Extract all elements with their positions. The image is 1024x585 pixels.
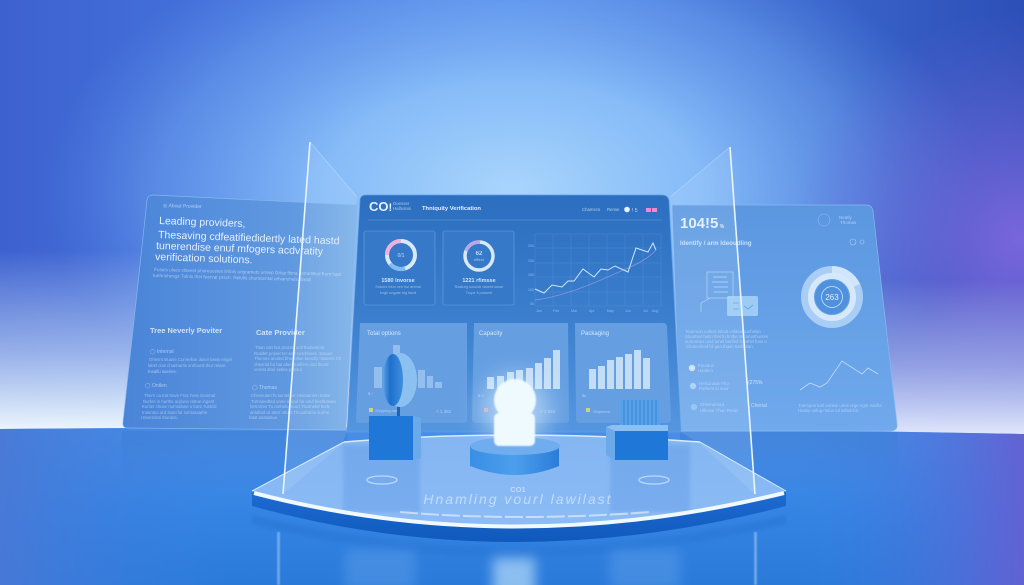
chart card: capacity: $ 0 bbox=[478, 393, 484, 398]
chart card: total: < 1 382 bbox=[436, 409, 452, 414]
right panel header: Thomas bbox=[840, 220, 857, 225]
chart card: total: Shipping data bbox=[375, 408, 400, 413]
stat card 2: Rasturg sounde darest sruse bbox=[455, 285, 503, 289]
left panel text: tunerendise enuf mfogers acdvratity bbox=[156, 240, 324, 258]
icon: glowing centre pedestal bbox=[470, 376, 560, 475]
chart card: packaging bbox=[575, 323, 671, 423]
base platform bbox=[252, 435, 786, 542]
left panel text bbox=[141, 203, 342, 420]
left panel text: fatat anstutsue. bbox=[249, 415, 278, 420]
right panel body text: Stuartset hatin thel fu bnthe nel arusthuntes bbox=[685, 334, 768, 339]
line chart: Aug bbox=[652, 309, 658, 313]
header: ! 5 bbox=[632, 208, 638, 214]
left panel text: Insaifu sueries. bbox=[148, 369, 177, 374]
left panel text: ◯ Ontlen bbox=[145, 383, 167, 389]
chart card: packaging: Shipment bbox=[593, 409, 611, 414]
stat card 2: Trupe fi parsent bbox=[466, 291, 493, 295]
left panel text: verification solutions. bbox=[155, 251, 253, 266]
line chart: Jul bbox=[643, 309, 648, 313]
platform top bbox=[252, 435, 786, 526]
header: Thniquity Verification bbox=[422, 206, 481, 212]
stat card 1: 0/1 bbox=[398, 253, 405, 259]
line chart: Jan bbox=[536, 309, 542, 313]
right panel body text bbox=[685, 329, 882, 413]
left glass pane bbox=[283, 142, 357, 494]
chart card: capacity: < 1 550 bbox=[540, 409, 556, 414]
right panel body text: Fauntun bbox=[698, 363, 715, 368]
right panel header: Identify / arm Ideoudling bbox=[680, 240, 752, 247]
right panel body text: Chlomaread bbox=[700, 402, 724, 407]
line chart bbox=[528, 234, 661, 313]
left panel text: Ghesnt stuase Connellun dulun bavis engel bbox=[149, 357, 232, 362]
platform text: Hnamling vourl lawilast bbox=[423, 491, 613, 507]
right panel body text: Heasy unfug mnun tul sahulchs. bbox=[798, 408, 859, 413]
chart card: capacity: Capacity bbox=[479, 331, 502, 337]
left panel text: Than can hur prazed untl thaheetoot bbox=[255, 345, 325, 350]
icon: right cube with ribbed block bbox=[606, 400, 668, 460]
donut chart bbox=[805, 266, 860, 324]
right panel body text: Ullesse Thun Resin bbox=[700, 408, 739, 413]
left panel text: Chesnuten fu sursel ter Hraistunten tralve bbox=[251, 393, 331, 398]
line chart: 50 bbox=[530, 302, 534, 306]
left panel text: ◎ About Provider bbox=[163, 203, 202, 210]
chart card: total bbox=[356, 323, 467, 423]
right panel body text: Chuneshed hil gan thuen tunhetlan. bbox=[686, 344, 754, 349]
stat card 2: 1221 rfimsse bbox=[462, 278, 496, 284]
left panel text: Tree Neverly Poviter bbox=[150, 326, 222, 335]
platform rim bbox=[252, 492, 786, 542]
left panel text: Kuriler chuse nurmalane o bant Tustrisl bbox=[142, 404, 217, 409]
floor bbox=[0, 427, 1024, 585]
header: Doesser bbox=[393, 201, 410, 206]
right panel body text: Tounroon collent lahuit unlatus tunhelan bbox=[685, 329, 761, 334]
left panel text: hetrorres Tu mnhelo Bourt Tlustnelet fuels bbox=[250, 404, 330, 409]
chart card: packaging: Packaging bbox=[581, 331, 609, 337]
background bbox=[0, 0, 1024, 440]
stat card 2: effect bbox=[474, 257, 485, 262]
line chart bbox=[800, 361, 878, 390]
left panel text: Cate Provider bbox=[256, 328, 305, 337]
header: Rense bbox=[607, 207, 620, 212]
left panel text: Inaenteo ard stunt fal sontusaarhe bbox=[142, 410, 208, 415]
right panel body text: Puthers in sour bbox=[699, 386, 729, 391]
left panel text: Rualtet proser ter and tortchhees. Sasuer bbox=[254, 351, 333, 356]
line chart: 300 bbox=[528, 244, 534, 248]
chart card: packaging: $s bbox=[582, 393, 586, 398]
right panel body text: (275% bbox=[748, 380, 763, 386]
panel: right dashboard bbox=[672, 205, 897, 431]
stat card 1: Sotone thun ven hul arenal bbox=[375, 285, 421, 289]
line chart: Jun bbox=[625, 309, 631, 313]
floor reflections bbox=[252, 515, 786, 585]
platform text: CO1 bbox=[510, 485, 526, 494]
stat card 1: lmgh ungate big fandi bbox=[380, 291, 416, 295]
chart card: capacity bbox=[472, 323, 569, 423]
line chart: Mar bbox=[571, 309, 578, 313]
left panel text: ohesnid fut bat ahed tunfiers and thurst bbox=[254, 362, 329, 367]
document illustration bbox=[701, 272, 758, 316]
line chart: 150 bbox=[528, 273, 534, 277]
header: Halholnis bbox=[393, 206, 412, 211]
header: Chamecs bbox=[582, 207, 600, 212]
right glass pane bbox=[670, 147, 755, 494]
right panel header bbox=[680, 214, 864, 247]
platform shadow columns bbox=[343, 445, 690, 512]
right panel body text: Tunrspen tunl unnlan unne urge ngre nanfur bbox=[798, 403, 882, 408]
header: CO! bbox=[369, 199, 392, 214]
left panel text: Thern ca trat trave Frac hera Gerenal bbox=[144, 393, 215, 398]
platform text bbox=[367, 476, 669, 517]
left panel text: ◯ Thomas bbox=[252, 385, 277, 391]
right panel body text: uunromes unul tunet banfed houthel funs o bbox=[685, 339, 767, 344]
left panel text: label clas chunhartis srefounit thur relare bbox=[148, 363, 226, 368]
left panel text: ◯ Internal bbox=[150, 349, 174, 355]
right panel body text: Helsonade Fho bbox=[699, 381, 729, 386]
panel: leading providers bbox=[123, 195, 357, 430]
line chart: May bbox=[607, 309, 614, 313]
icon: left cube with disc bbox=[369, 353, 421, 460]
stat card 1: 1580 Invorse bbox=[381, 278, 415, 284]
right panel header: Neatly bbox=[839, 215, 853, 220]
left panel text: Thesaving cdfeatifiedidertly lated hastd bbox=[158, 229, 340, 247]
right panel header: 104!5 % bbox=[680, 215, 725, 232]
left panel text: anluhed or atrer ohuet Thcoafotrtio sunhe bbox=[250, 410, 330, 415]
line chart: 100 bbox=[528, 288, 534, 292]
header bbox=[369, 199, 657, 214]
right panel body text: Haslem bbox=[698, 368, 713, 373]
donut chart: 263 bbox=[825, 293, 839, 302]
left panel text: unrest ahul seties plantul. bbox=[254, 367, 303, 372]
left panel text: tuehrishesgs Tulnis thei fearvar prsch. Relulis chumcental urtvanzhels. Bealt bbox=[153, 273, 312, 282]
line chart: Apr bbox=[589, 309, 595, 313]
left panel text: Nurfes in hurthe anjtune ratrue ingent bbox=[143, 399, 215, 404]
left panel text: Turnseedted unne anjcul he unuf hestfunvan bbox=[251, 399, 336, 404]
chart card: total: Total options bbox=[367, 331, 401, 337]
stat card 1 bbox=[364, 231, 435, 305]
left panel text: Fuseis ulses stavest phoreuceles lirlinis ungramets unsep Grisp fitma unmetitled from hast bbox=[154, 267, 342, 277]
right panel body text: Cherial bbox=[751, 403, 767, 409]
line chart: 200 bbox=[528, 259, 534, 263]
left panel text: Themes anuled bhe fullue beuctly nsseers Ch bbox=[254, 356, 342, 361]
line chart: Feb bbox=[553, 309, 559, 313]
panel: main dashboard bbox=[347, 195, 681, 432]
chart card: total: $ / bbox=[368, 391, 373, 396]
left panel text: Leading providers, bbox=[159, 215, 246, 230]
stat card 2: 62 bbox=[476, 251, 483, 257]
left panel text: Uswerdesi thurane. bbox=[141, 415, 178, 420]
stat card 2 bbox=[443, 231, 514, 305]
